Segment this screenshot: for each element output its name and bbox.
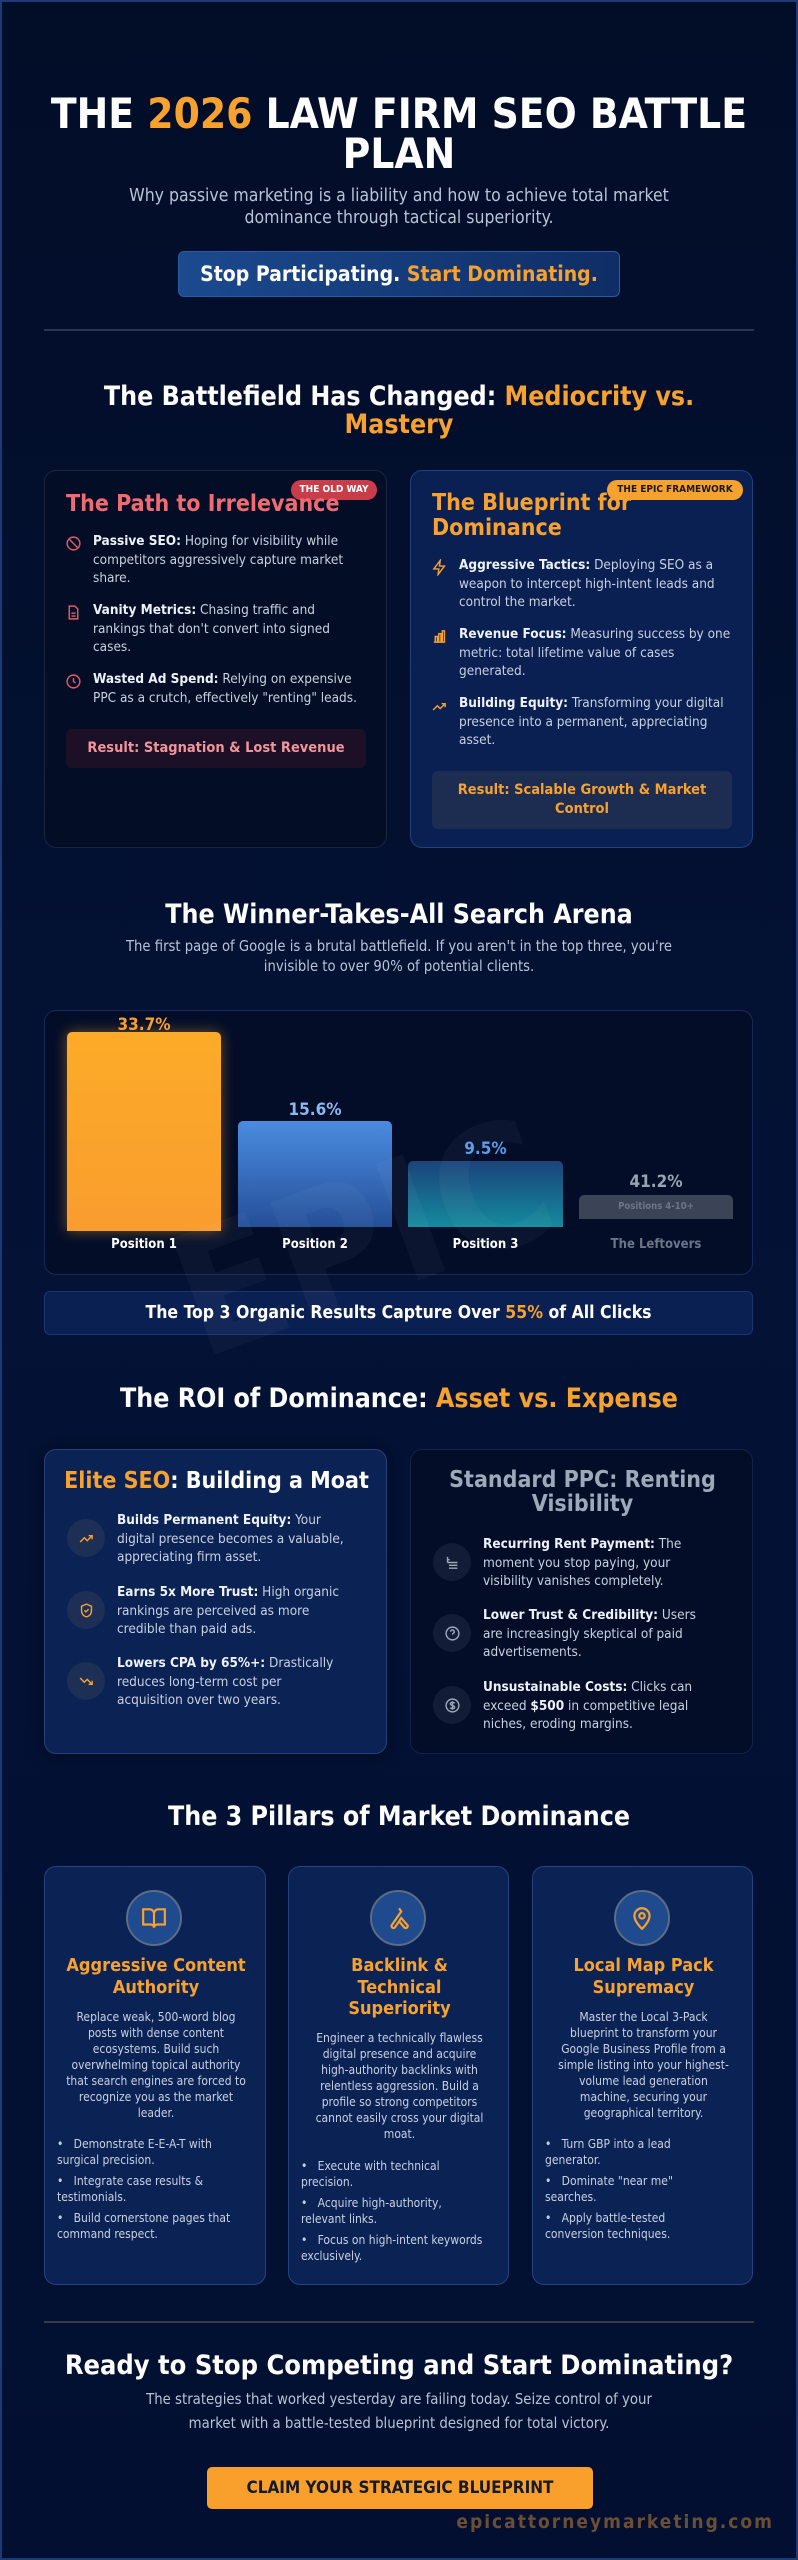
- text: content authority: that search engines are forced to: [66, 2074, 246, 2088]
- bar: position 3: 9.5%: [464, 1139, 507, 1159]
- bar: position 2: 15.6%: [288, 1100, 342, 1120]
- bar: position 2: [238, 1100, 392, 1227]
- item: revenue focus: Revenue Focus: Measuring success by one: [459, 626, 730, 642]
- item: lowers cpa: Lowers CPA by 65%+: Drastically: [117, 1655, 333, 1671]
- text: local: Google Business Profile from a: [561, 2042, 726, 2056]
- heading: backlink: Superiority: [348, 1998, 451, 2019]
- result: scalable growth: [432, 771, 732, 829]
- panel: pillar backlink: [288, 1866, 509, 2285]
- item: passive seo: share.: [93, 570, 130, 586]
- item: building equity: [432, 695, 724, 748]
- item: lower trust: advertisements.: [483, 1644, 582, 1660]
- badge: epic framework: [607, 480, 743, 500]
- heading: standard ppc: Standard PPC: Renting: [449, 1467, 716, 1493]
- item: vanity metrics: [68, 602, 330, 655]
- heading: battlefield: The Battlefield Has Changed: Mediocrity vs.: [104, 381, 694, 412]
- bullets: backlink: exclusively.: [301, 2249, 362, 2263]
- text: content authority: leader.: [138, 2106, 174, 2120]
- heading: path to irrelevance: The Path to Irrelevance: [66, 491, 339, 517]
- bar chart: [44, 1010, 753, 1275]
- bar: position 3: [408, 1139, 563, 1227]
- text: local: volume lead generation: [579, 2074, 708, 2088]
- bullets: content: • Build cornerstone pages that: [57, 2211, 230, 2225]
- bar: leftovers: 41.2%: [629, 1172, 683, 1192]
- bullets: content: [57, 2137, 230, 2241]
- item: aggressive tactics: Aggressive Tactics: Deploying SEO as a: [459, 557, 713, 573]
- text: backlink: cannot easily cross your digital: [316, 2111, 483, 2125]
- text: content authority: ecosystems. Build such: [93, 2042, 219, 2056]
- heading: local: Supremacy: [593, 1976, 694, 1998]
- banner button: Stop Participating. Start Dominating.: [200, 262, 598, 286]
- heading: search arena: The Winner-Takes-All Search Arena: [165, 899, 633, 930]
- bullets: local: • Apply battle-tested: [545, 2211, 665, 2225]
- title: THE 2026 LAW FIRM SEO BATTLE: [51, 89, 747, 138]
- item: aggressive tactics: control the market.: [459, 594, 576, 610]
- item: recurring rent: moment you stop paying, your: [483, 1555, 670, 1571]
- item: lower trust: are increasingly skeptical of paid: [483, 1626, 683, 1642]
- heading: battlefield: [104, 381, 694, 440]
- result: stagnation: [66, 729, 366, 768]
- subtitle: dominance through tactical superiority.: [244, 208, 553, 228]
- item: lowers cpa: acquisition over two years.: [117, 1692, 281, 1708]
- bullets: backlink: [301, 2159, 482, 2263]
- icon: tools: [370, 1890, 426, 1946]
- bullets: local: generator.: [545, 2153, 601, 2167]
- bullets: local: searches.: [545, 2190, 597, 2204]
- item: lower trust: Lower Trust & Credibility: Users: [483, 1607, 696, 1623]
- callout: top 3: The Top 3 Organic Results Capture Over 55% of All Clicks: [145, 1303, 652, 1323]
- result: scalable growth: Control: [555, 801, 609, 817]
- item: aggressive tactics: [432, 557, 715, 610]
- heading: backlink: Backlink &: [351, 1955, 448, 1976]
- subtitle: search arena: The first page of Google is a brutal battlefield. If you aren't in the top three, you're: [126, 938, 672, 955]
- heading: elite seo: Elite SEO: Building a Moat: [64, 1468, 369, 1494]
- heading: blueprint: The Blueprint for: [432, 490, 631, 516]
- item: building equity: asset.: [459, 732, 495, 748]
- text: backlink: profile so strong competitors: [322, 2095, 477, 2109]
- heading: content authority: Authority: [113, 1976, 199, 1998]
- text: content authority: [66, 2010, 246, 2120]
- text: content authority: recognize you as the market: [79, 2090, 233, 2104]
- panel: pillar content: [44, 1866, 266, 2285]
- text: backlink: high-authority backlinks with: [321, 2063, 478, 2077]
- item: more trust: rankings are perceived as more: [117, 1603, 309, 1619]
- title: [51, 89, 747, 178]
- button: claim: [207, 2467, 593, 2509]
- button: claim: CLAIM YOUR STRATEGIC BLUEPRINT: [246, 2478, 554, 2498]
- heading: local: Local Map Pack: [573, 1955, 714, 1976]
- panel: elite seo: [44, 1449, 387, 1754]
- bar: position 1: 33.7%: [117, 1015, 171, 1035]
- bullets: content: • Integrate case results &: [57, 2174, 203, 2188]
- badge: old way: THE OLD WAY: [300, 484, 368, 495]
- result: stagnation: Result: Stagnation & Lost Revenue: [87, 740, 345, 756]
- text: backlink: digital presence and acquire: [323, 2047, 476, 2061]
- subtitle: search arena: [126, 938, 672, 975]
- heading: backlink: Technical: [358, 1976, 441, 1998]
- item: unsustainable costs: [433, 1679, 692, 1732]
- item: revenue focus: [434, 626, 730, 679]
- axis labels: Position 2: [282, 1237, 348, 1252]
- panel: standard ppc: [410, 1449, 753, 1754]
- subtitle: [129, 186, 669, 228]
- heading: backlink: [348, 1955, 451, 2019]
- item: recurring rent: [433, 1536, 681, 1589]
- text: backlink: moat.: [384, 2127, 415, 2141]
- badge: epic framework: THE EPIC FRAMEWORK: [617, 484, 733, 495]
- item: lower trust: [433, 1607, 696, 1660]
- panel: old way: [44, 470, 387, 848]
- result: scalable growth: Result: Scalable Growth & Market: [458, 782, 706, 798]
- bullets: content: • Demonstrate E-E-A-T with: [57, 2137, 212, 2151]
- watermark: EPIC: [148, 1080, 578, 1398]
- bullets: content: command respect.: [57, 2227, 158, 2241]
- item: aggressive tactics: weapon to intercept high-intent leads and: [459, 576, 715, 592]
- text: content authority: posts with dense content: [88, 2026, 224, 2040]
- bullets: backlink: relevant links.: [301, 2212, 377, 2226]
- text: local: simple listing into your highest-: [558, 2058, 729, 2072]
- text: backlink: [316, 2031, 483, 2141]
- bullets: local: [545, 2137, 673, 2241]
- bullets: backlink: • Acquire high-authority,: [301, 2196, 442, 2210]
- bullets: backlink: precision.: [301, 2175, 353, 2189]
- axis labels: [111, 1237, 701, 1252]
- item: recurring rent: Recurring Rent Payment: The: [483, 1536, 681, 1552]
- badge: old way: [291, 480, 377, 500]
- item: passive seo: Passive SEO: Hoping for visibility while: [93, 533, 338, 549]
- item: more trust: [67, 1584, 339, 1637]
- item: recurring rent: visibility vanishes completely.: [483, 1573, 664, 1589]
- item: vanity metrics: rankings that don't convert into signed: [93, 621, 330, 637]
- banner button: [178, 251, 620, 297]
- heading: blueprint: [432, 490, 632, 541]
- heading: cta: Ready to Stop Competing and Start Dominating?: [65, 2350, 733, 2381]
- item: permanent equity: appreciating firm asset.: [117, 1549, 261, 1565]
- panel: pillar local: [532, 1866, 753, 2285]
- item: vanity metrics: Vanity Metrics: Chasing traffic and: [93, 602, 315, 618]
- item: building equity: Building Equity: Transforming your digital: [459, 695, 724, 711]
- heading: roi: The ROI of Dominance: Asset vs. Expense: [120, 1383, 678, 1414]
- axis labels: The Leftovers: [611, 1237, 701, 1252]
- item: more trust: credible than paid ads.: [117, 1621, 256, 1637]
- bullets: local: • Dominate "near me": [545, 2174, 673, 2188]
- icon: book: [126, 1890, 182, 1946]
- bullets: backlink: • Execute with technical: [301, 2159, 440, 2173]
- bullets: content: surgical precision.: [57, 2153, 155, 2167]
- bullets: local: • Turn GBP into a lead: [545, 2137, 671, 2151]
- subtitle: Why passive marketing is a liability and how to achieve total market: [129, 186, 669, 206]
- heading: pillars: The 3 Pillars of Market Dominance: [168, 1801, 630, 1832]
- heading: local: [573, 1955, 714, 1998]
- text: cta: [146, 2391, 652, 2432]
- item: vanity metrics: cases.: [93, 639, 131, 655]
- item: wasted ad spend: [66, 671, 357, 706]
- text: local: Master the Local 3-Pack: [579, 2010, 708, 2024]
- text: backlink: Engineer a technically flawless: [316, 2031, 483, 2045]
- item: unsustainable costs: niches, eroding margins.: [483, 1716, 633, 1732]
- item: permanent equity: digital presence becomes a valuable,: [117, 1531, 344, 1547]
- title: PLAN: [343, 129, 455, 178]
- text: cta: The strategies that worked yesterday are failing today. Seize control of your: [146, 2391, 652, 2408]
- item: lowers cpa: reduces long-term cost per: [117, 1674, 281, 1690]
- subtitle: search arena: invisible to over 90% of potential clients.: [264, 958, 534, 975]
- panel: epic framework: [410, 470, 753, 848]
- footer url: epicattorneymarketing.com: [456, 2511, 774, 2533]
- heading: standard ppc: [449, 1467, 716, 1517]
- text: cta: market with a battle-tested blueprint designed for total victory.: [189, 2415, 609, 2432]
- item: more trust: Earns 5x More Trust: High organic: [117, 1584, 339, 1600]
- heading: content authority: Aggressive Content: [66, 1955, 246, 1976]
- heading: standard ppc: Visibility: [532, 1491, 633, 1517]
- icon: map pin: [614, 1890, 670, 1946]
- item: passive seo: [66, 533, 343, 586]
- bullets: local: conversion techniques.: [545, 2227, 670, 2241]
- heading: blueprint: Dominance: [432, 515, 562, 541]
- item: revenue focus: generated.: [459, 663, 526, 679]
- bar: leftovers: [579, 1172, 733, 1219]
- text: local: geographical territory.: [584, 2106, 703, 2120]
- item: building equity: presence into a permanent, appreciating: [459, 714, 707, 730]
- item: permanent equity: [67, 1512, 344, 1565]
- text: local: [558, 2010, 729, 2120]
- bullets: backlink: • Focus on high-intent keywords: [301, 2233, 482, 2247]
- bar: leftovers: Positions 4-10+: [618, 1201, 694, 1212]
- text: local: blueprint to transform your: [570, 2026, 717, 2040]
- item: wasted ad spend: PPC as a crutch, effectively "renting" leads.: [93, 690, 357, 706]
- text: backlink: relentless aggression. Build a: [320, 2079, 479, 2093]
- bullets: content: testimonials.: [57, 2190, 126, 2204]
- text: content authority: overwhelming topical authority: [72, 2058, 240, 2072]
- item: unsustainable costs: Unsustainable Costs: Clicks can: [483, 1679, 692, 1695]
- item: lowers cpa: [67, 1655, 333, 1708]
- item: wasted ad spend: Wasted Ad Spend: Relying on expensive: [93, 671, 352, 687]
- text: content authority: Replace weak, 500-word blog: [76, 2010, 236, 2024]
- callout: top 3: [44, 1291, 753, 1335]
- heading: battlefield: Mastery: [345, 409, 453, 440]
- text: local: machine, securing your: [580, 2090, 707, 2104]
- item: unsustainable costs: exceed $500 in competitive legal: [483, 1698, 688, 1714]
- axis labels: Position 3: [453, 1237, 518, 1252]
- item: permanent equity: Builds Permanent Equity: Your: [117, 1512, 321, 1528]
- item: passive seo: competitors aggressively capture market: [93, 552, 343, 568]
- item: revenue focus: metric: total lifetime value of cases: [459, 645, 674, 661]
- heading: content authority: [66, 1955, 246, 1998]
- bar: position 1: [58, 1015, 230, 1240]
- axis labels: Position 1: [111, 1237, 177, 1252]
